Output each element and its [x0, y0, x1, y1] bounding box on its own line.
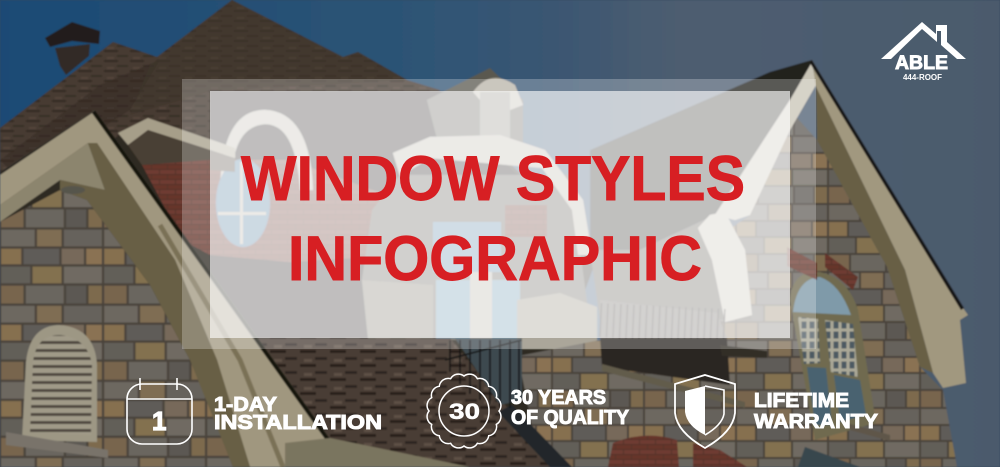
background: left gable fascia	[118, 118, 235, 255]
icon: calendar: 1	[152, 406, 166, 436]
logo: Able 444-Roof	[881, 22, 966, 82]
icon: seal badge	[427, 374, 501, 448]
panel: inner translucent box	[210, 91, 790, 338]
feature text: LIFETIME	[754, 390, 849, 412]
background: main dark roof	[0, 0, 600, 340]
icon: seal badge: 30	[449, 399, 480, 424]
background: round window hood and brick	[210, 110, 400, 262]
feature text: INSTALLATION	[214, 412, 382, 434]
background: left vent	[6, 325, 108, 458]
feature text: 1-DAY	[214, 394, 278, 416]
background: house backfill	[0, 0, 600, 467]
background: balcony railing	[600, 300, 767, 408]
feature: 30 years of quality	[427, 374, 630, 448]
icon: shield	[675, 375, 735, 448]
logo phone: 444-ROOF	[903, 73, 942, 82]
icon: house roof	[881, 22, 966, 59]
background: right gable trim	[810, 60, 968, 388]
background: dormer	[427, 68, 523, 150]
feature text	[754, 390, 879, 433]
background: left stone wall	[0, 190, 233, 467]
background: balcony front railing	[445, 340, 522, 408]
background: metal awning	[798, 447, 860, 467]
background: lower roof	[258, 338, 572, 467]
feature: lifetime warranty	[675, 375, 879, 448]
title	[241, 144, 745, 294]
background: right roof slope	[590, 60, 812, 250]
icon: calendar	[127, 378, 192, 444]
logo name: ABLE	[895, 53, 948, 74]
feature: 1-day installation	[127, 378, 382, 444]
background: chimney	[45, 22, 100, 75]
background: right wall	[518, 110, 957, 467]
background: wall under the right roof	[590, 215, 752, 320]
feature text	[511, 387, 630, 429]
title: INFOGRAPHIC	[288, 224, 702, 294]
feature text: OF QUALITY	[511, 407, 630, 429]
feature text	[214, 394, 382, 434]
background: lower brick arches	[608, 436, 747, 467]
background: left gable trim and soffit	[0, 110, 333, 467]
panel: outer translucent frame	[182, 79, 816, 349]
background: fascia beside lower roof	[285, 438, 470, 467]
feature text: 30 YEARS	[511, 387, 606, 409]
title: WINDOW STYLES	[241, 144, 745, 214]
background: central dormer hood and window	[362, 135, 597, 349]
background: white gable edge	[698, 62, 816, 322]
background: right arched window	[787, 247, 890, 441]
feature text: WARRANTY	[754, 411, 879, 433]
